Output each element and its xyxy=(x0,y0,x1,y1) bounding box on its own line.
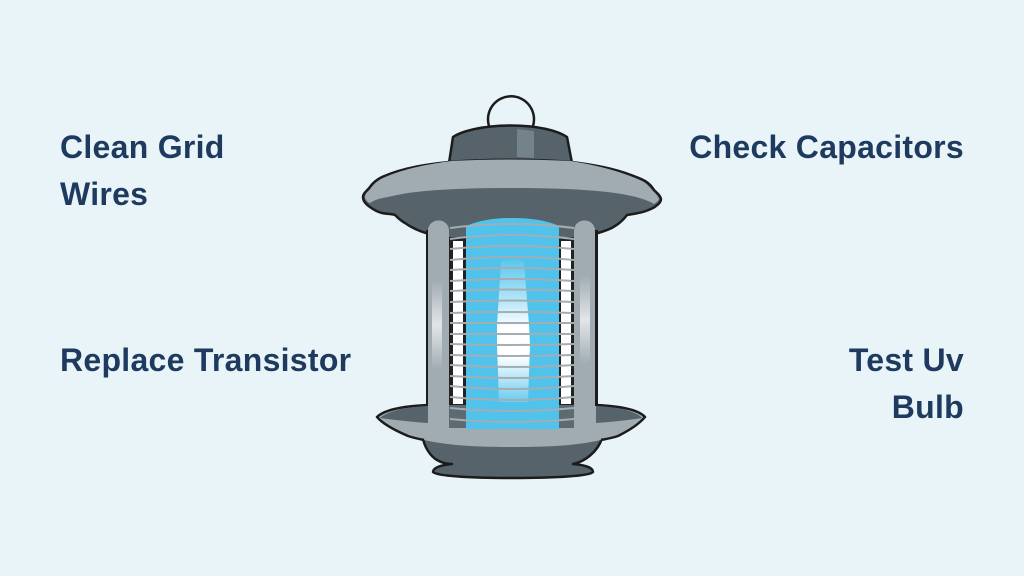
label: clean grid wires xyxy=(60,129,225,212)
grid interior xyxy=(449,222,575,428)
grid wires xyxy=(450,224,574,422)
label: replace transistor: Replace Transistor xyxy=(60,342,351,378)
label: clean grid wires: Wires xyxy=(60,176,148,212)
label: test uv bulb xyxy=(849,342,964,424)
base plate xyxy=(377,405,645,447)
lantern body outline xyxy=(426,230,598,406)
label: test uv bulb: Test Uv xyxy=(849,342,964,378)
base bowl and foot xyxy=(423,438,602,478)
right pillar xyxy=(574,220,595,440)
uv bulb xyxy=(466,218,559,429)
lantern cap xyxy=(449,126,572,163)
label: test uv bulb: Bulb xyxy=(892,388,964,424)
label: check capacitors: Check Capacitors xyxy=(689,129,964,165)
icon: hanging ring xyxy=(488,96,534,126)
label: clean grid wires: Clean Grid xyxy=(60,129,225,165)
lantern brim xyxy=(363,160,661,233)
left pillar xyxy=(428,220,449,440)
